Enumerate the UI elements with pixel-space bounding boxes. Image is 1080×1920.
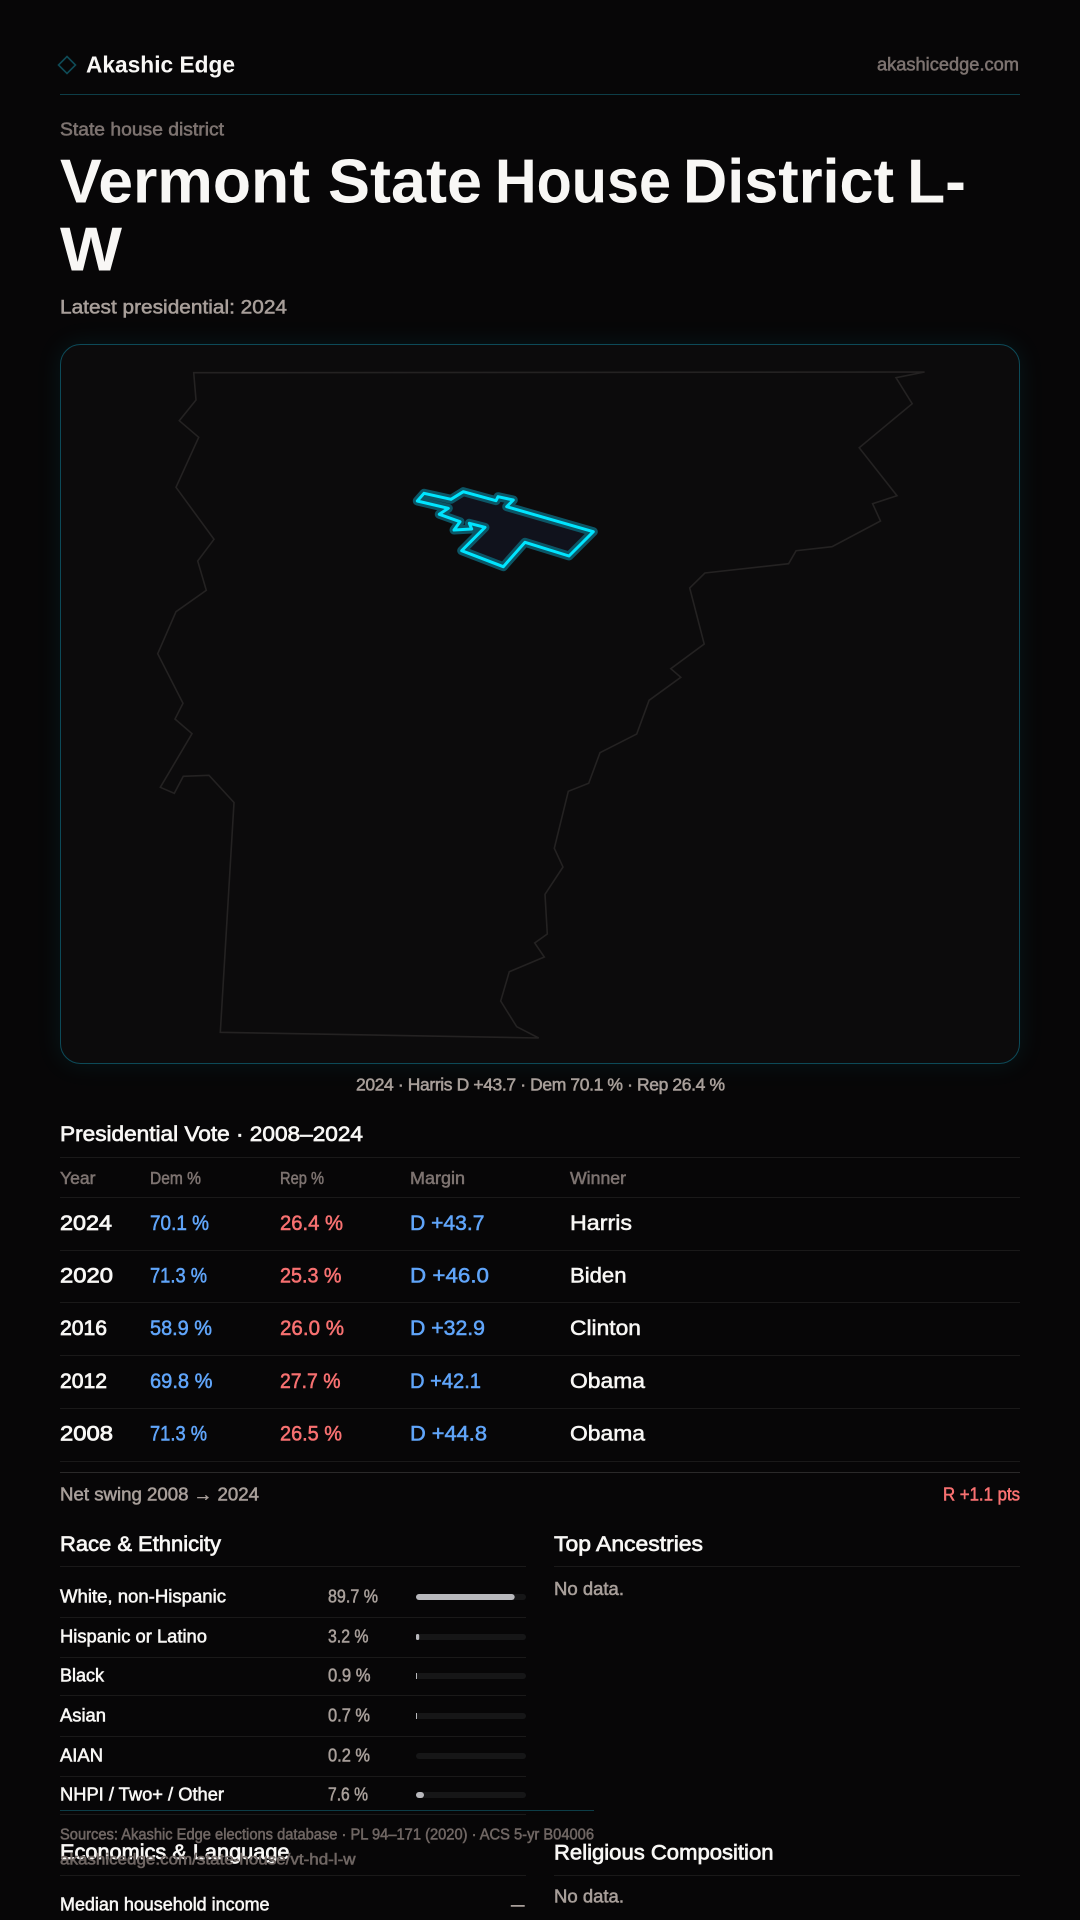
no data note: No data.	[554, 1579, 624, 1599]
row 2016: 58.9 %	[150, 1316, 212, 1340]
table header row: Dem %	[150, 1168, 201, 1188]
panel: race and ethnicity	[60, 1532, 526, 1805]
row: median household income	[60, 1894, 525, 1915]
row 2020: 71.3 %	[150, 1264, 207, 1288]
row 2024: D +43.7	[410, 1211, 484, 1235]
row 2020: 25.3 %	[280, 1264, 342, 1288]
row: AIAN: AIAN	[60, 1745, 103, 1766]
table heading: Presidential Vote · 2008–2024	[60, 1122, 363, 1146]
row 2008: 2008	[60, 1422, 113, 1446]
row 2012: Obama	[570, 1369, 645, 1393]
title: District	[683, 147, 894, 216]
panel: presidential vote table	[60, 1122, 1020, 1462]
page url: akashicedge.com/state-house/vt-hd-l-w	[60, 1851, 356, 1868]
net swing row: R +1.1 pts	[943, 1485, 1020, 1505]
row 2024	[60, 1211, 632, 1235]
row 2008: 26.5 %	[280, 1422, 342, 1446]
row: AIAN	[60, 1745, 526, 1766]
row 2024: 2024	[60, 1211, 112, 1235]
map caption: 2024 · Harris D +43.7 · Dem 70.1 % · Rep 26.4 %	[356, 1075, 725, 1095]
map: Vermont state outline	[158, 372, 925, 1038]
map: highlighted district L-W	[417, 492, 593, 567]
title: L-	[907, 147, 966, 216]
row 2008: Obama	[570, 1422, 645, 1446]
title: House	[495, 147, 671, 216]
table header row: Winner	[570, 1168, 626, 1188]
title: State	[328, 147, 482, 216]
eyebrow: district type: State house district	[60, 120, 224, 140]
sources line: Sources: Akashic Edge elections database · PL 94–171 (2020) · ACS 5-yr B04006	[60, 1826, 594, 1843]
row 2012: 2012	[60, 1369, 107, 1393]
table header row	[60, 1168, 626, 1188]
net swing row: Net swing 2008 → 2024	[60, 1485, 259, 1505]
row 2008: 71.3 %	[150, 1422, 207, 1446]
row: NHPI	[60, 1784, 526, 1805]
row 2016: Clinton	[570, 1316, 641, 1340]
panel: map	[60, 344, 1020, 1064]
row 2024: 70.1 %	[150, 1211, 209, 1235]
row: Black: Black	[60, 1665, 105, 1686]
row 2008	[60, 1422, 645, 1446]
row: White	[60, 1586, 526, 1607]
row 2020: 2020	[60, 1264, 113, 1288]
row 2016: 26.0 %	[280, 1316, 344, 1340]
row: AIAN: 0.2 %	[328, 1745, 370, 1766]
row 2020	[60, 1264, 626, 1288]
page header	[58, 51, 1020, 94]
row 2020: D +46.0	[410, 1264, 489, 1288]
no data note: No data.	[554, 1887, 624, 1907]
row: Hispanic: 3.2 %	[328, 1626, 368, 1647]
footer overlay	[60, 1810, 594, 1868]
row 2016	[60, 1316, 641, 1340]
panel: top ancestries	[554, 1532, 1020, 1599]
table header row: Margin	[410, 1168, 465, 1188]
row: median household income: —	[511, 1894, 525, 1915]
table header row: Year	[60, 1168, 96, 1188]
row 2008: D +44.8	[410, 1422, 487, 1446]
section heading: Race & Ethnicity	[60, 1532, 221, 1556]
row 2024: Harris	[570, 1211, 632, 1235]
row 2016: D +32.9	[410, 1316, 485, 1340]
row 2020: Biden	[570, 1264, 626, 1288]
row 2024: 26.4 %	[280, 1211, 343, 1235]
panel: economics and language	[60, 1840, 526, 1915]
row: NHPI: NHPI / Two+ / Other	[60, 1784, 224, 1805]
row 2012: 27.7 %	[280, 1369, 340, 1393]
row: Hispanic	[60, 1626, 526, 1647]
row 2012: 69.8 %	[150, 1369, 212, 1393]
subtitle: Latest presidential: 2024	[60, 296, 287, 318]
row 2016: 2016	[60, 1316, 107, 1340]
section heading: Religious Composition	[554, 1840, 774, 1864]
row: median household income: Median household income	[60, 1894, 270, 1915]
section heading: Economics & Language	[60, 1840, 290, 1864]
row: Asian: 0.7 %	[328, 1705, 370, 1726]
row: Asian	[60, 1705, 526, 1726]
row: Asian: Asian	[60, 1705, 106, 1726]
brand name: Akashic Edge	[86, 51, 235, 77]
title	[60, 147, 966, 285]
title: Vermont	[60, 147, 310, 216]
row: Hispanic: Hispanic or Latino	[60, 1626, 207, 1647]
row 2012	[60, 1369, 645, 1393]
section heading: Top Ancestries	[554, 1532, 703, 1556]
site url: akashicedge.com	[877, 55, 1019, 75]
row: NHPI: 7.6 %	[328, 1784, 368, 1805]
icon: brand diamond	[58, 56, 76, 74]
row: Black: 0.9 %	[328, 1665, 370, 1686]
row 2012: D +42.1	[410, 1369, 481, 1393]
row: White: White, non-Hispanic	[60, 1586, 226, 1607]
net swing row	[60, 1485, 1020, 1505]
row: White: 89.7 %	[328, 1586, 378, 1607]
table header row: Rep %	[280, 1168, 324, 1188]
panel: religious composition	[554, 1840, 1020, 1907]
row: Black	[60, 1665, 526, 1686]
title: W	[60, 216, 122, 285]
